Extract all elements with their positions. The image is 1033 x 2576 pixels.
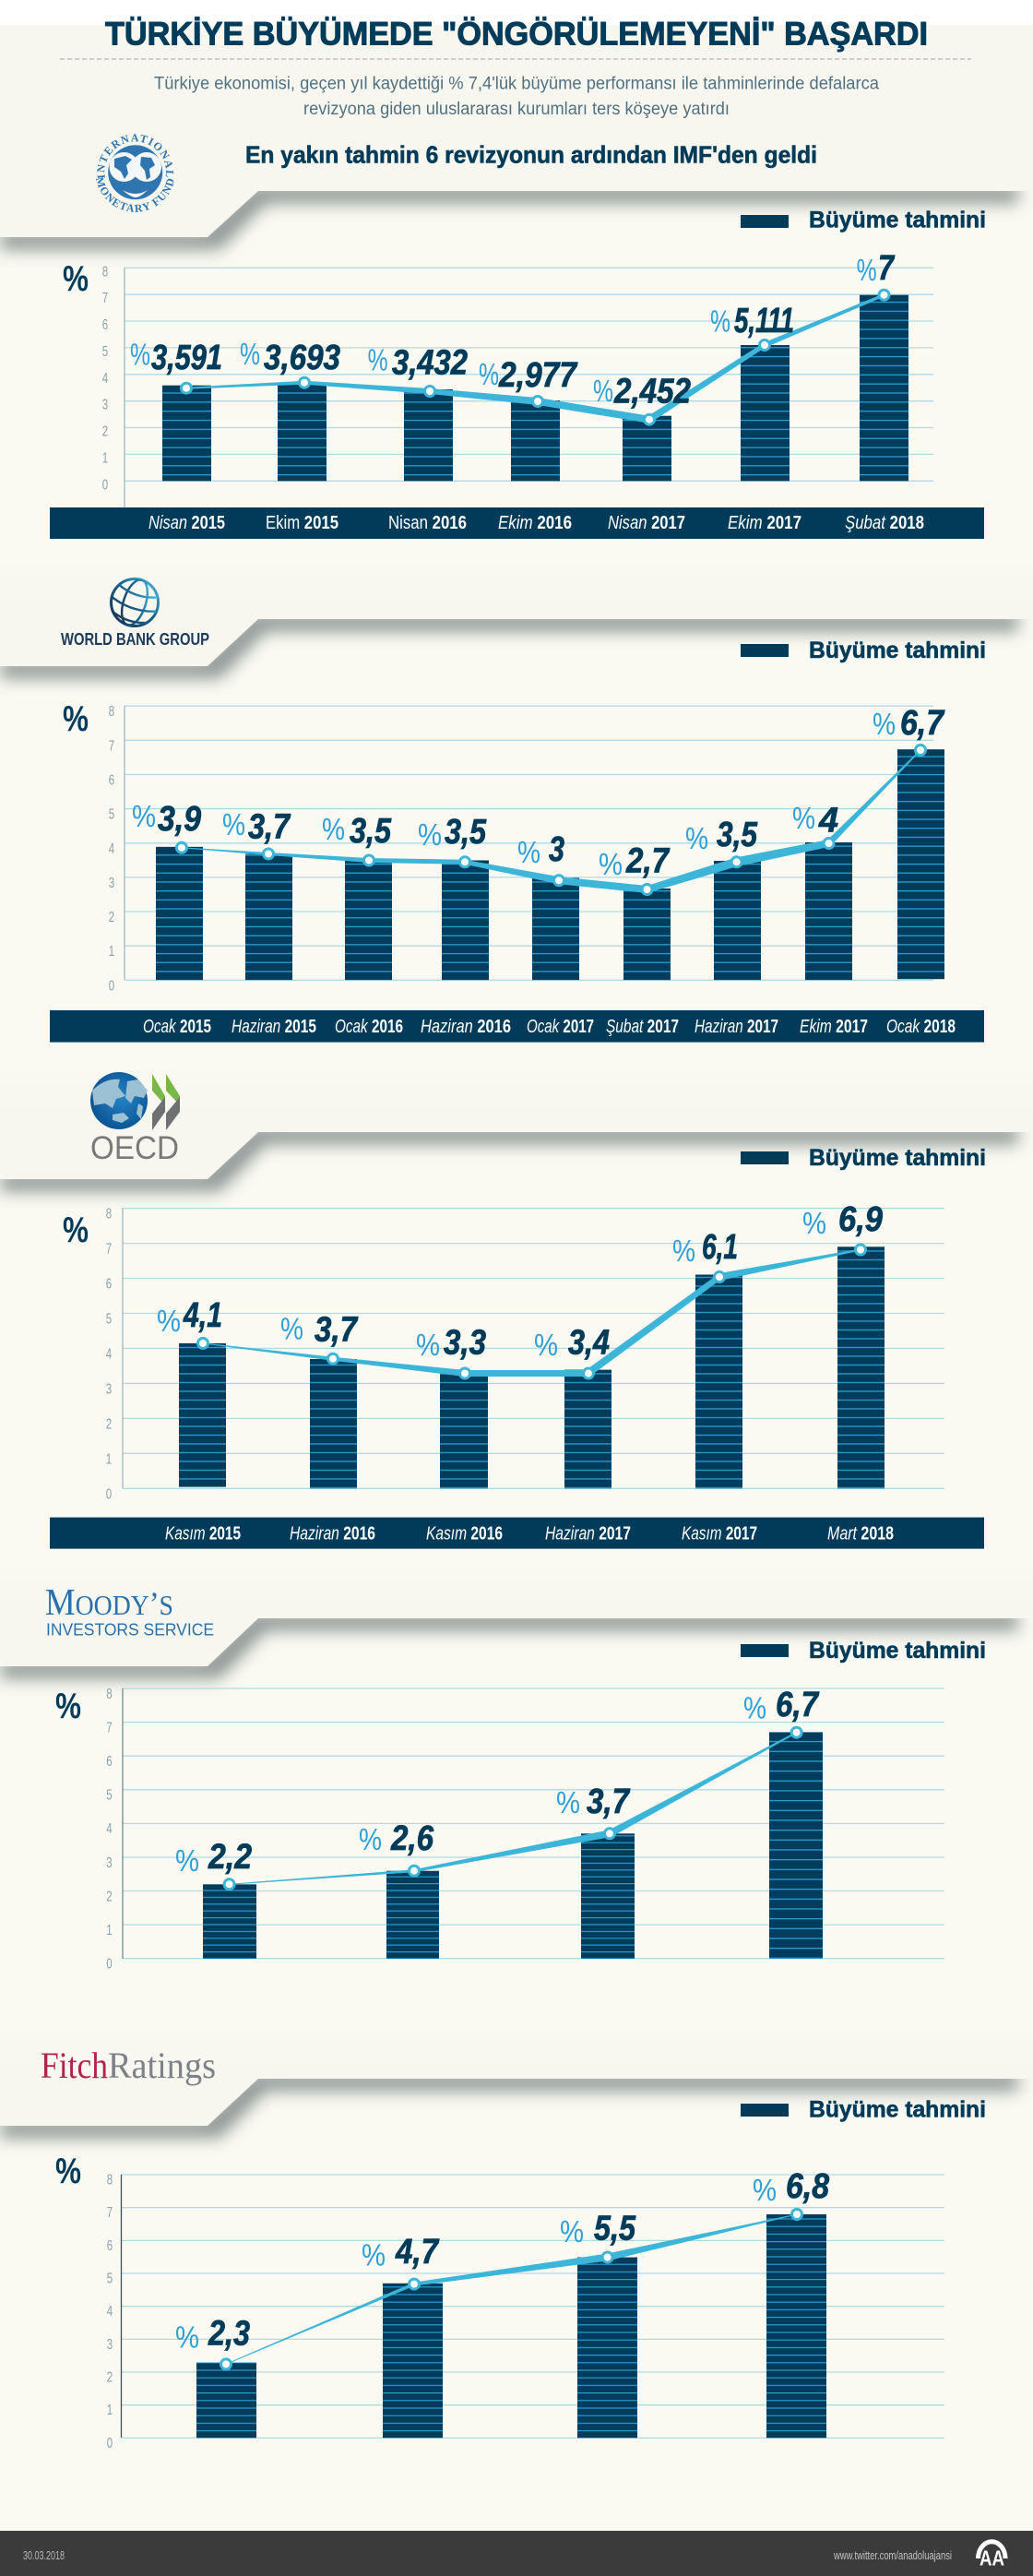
unit label: % <box>55 1687 81 1726</box>
icon: OECD globe and chevrons logo <box>90 1072 180 1130</box>
y axis ticks: 1 <box>107 2401 113 2418</box>
y axis ticks: 4 <box>107 2302 113 2320</box>
legend: Büyüme tahmini <box>809 1638 986 1664</box>
y axis ticks: 0 <box>106 1485 112 1502</box>
value labels: % <box>368 343 388 377</box>
date band: Ekim 2016 <box>498 513 572 533</box>
icon: World Bank globe logo <box>105 573 164 632</box>
World Bank wordmark: WORLD BANK GROUP <box>61 629 209 649</box>
y axis ticks: 0 <box>107 2434 113 2451</box>
date band: Ekim 2017 <box>728 513 801 533</box>
value labels: % <box>175 2320 199 2355</box>
date band: Ocak 2015 <box>143 1017 211 1037</box>
date band: Ocak 2016 <box>335 1017 403 1037</box>
date band: Ekim 2015 <box>266 513 338 533</box>
value labels: 2,2 <box>208 1838 252 1877</box>
value labels: 3,9 <box>158 800 201 839</box>
intro text: Türkiye ekonomisi, geçen yıl kaydettiği % 7,4'lük büyüme performansı ile tahminlerinde defalarca <box>154 75 879 94</box>
bar chart <box>196 2214 826 2438</box>
value labels: % <box>416 1328 440 1362</box>
value labels: 2,452 <box>613 373 691 411</box>
value labels: % <box>157 1304 181 1338</box>
y axis ticks <box>107 2171 113 2451</box>
date band: Kasım 2015 <box>165 1523 241 1544</box>
y axis ticks: 0 <box>102 475 108 493</box>
value labels: 6,1 <box>702 1228 738 1267</box>
data points <box>181 290 889 424</box>
value labels: % <box>560 2214 584 2248</box>
value labels: % <box>534 1328 558 1362</box>
y axis ticks: 3 <box>106 1854 113 1870</box>
y axis ticks: 3 <box>109 874 114 890</box>
y axis ticks: 6 <box>106 1752 113 1769</box>
value labels: % <box>873 707 896 741</box>
legend: Büyüme tahmini <box>809 638 986 663</box>
date band <box>50 1518 984 1549</box>
date band: Nisan 2017 <box>608 513 685 533</box>
value labels: % <box>175 1843 199 1878</box>
y axis ticks: 4 <box>102 369 108 386</box>
icon: Anadolu Agency logo: AA <box>980 2546 1004 2570</box>
value labels: % <box>802 1206 826 1240</box>
value labels: % <box>418 817 442 852</box>
y axis ticks: 8 <box>106 1685 113 1701</box>
y axis ticks: 7 <box>106 1240 112 1257</box>
value labels: % <box>710 304 730 338</box>
Fitch Ratings logo: Ratings <box>108 2045 216 2086</box>
value labels: % <box>743 1691 766 1725</box>
y axis ticks: 6 <box>107 2236 113 2253</box>
y axis ticks: 2 <box>102 423 108 439</box>
date band: Nisan 2015 <box>148 513 225 533</box>
y axis ticks: 0 <box>109 976 114 994</box>
footer <box>0 2531 1033 2576</box>
value labels: % <box>685 821 708 855</box>
panel: World Bank <box>0 554 1033 1043</box>
panel: IMF <box>0 134 1028 539</box>
unit label: % <box>63 699 89 739</box>
value labels: % <box>130 338 150 372</box>
trend line <box>186 293 884 423</box>
value labels: 7 <box>878 249 895 288</box>
value labels: 4,7 <box>395 2233 440 2272</box>
date band: Haziran 2015 <box>232 1017 316 1037</box>
value labels: 3,3 <box>444 1323 486 1362</box>
chart grid and axis <box>125 268 933 507</box>
value labels: % <box>672 1234 695 1268</box>
y axis ticks: 3 <box>102 396 108 412</box>
value labels: 4 <box>818 802 838 841</box>
unit label: % <box>55 2152 81 2191</box>
Fitch Ratings logo: Fitch <box>41 2045 108 2086</box>
subheading: En yakın tahmin 6 revizyonun ardından IMF'den geldi <box>245 141 817 169</box>
y axis ticks: 7 <box>106 1718 113 1735</box>
trend line <box>226 2214 797 2365</box>
date band: Haziran 2016 <box>290 1523 375 1544</box>
legend: Büyüme tahmini <box>809 208 986 233</box>
y axis ticks: 2 <box>107 2368 113 2385</box>
icon: Anadolu Agency logo <box>978 2542 1005 2570</box>
value labels: % <box>222 807 245 841</box>
y axis ticks: 6 <box>106 1275 112 1292</box>
unit label: % <box>63 259 89 299</box>
date band: Mart 2018 <box>827 1523 894 1544</box>
value labels: % <box>857 253 877 287</box>
value labels: 2,7 <box>625 841 671 880</box>
data points <box>197 1245 865 1378</box>
OECD wordmark: OECD <box>90 1130 179 1166</box>
y axis ticks <box>106 1205 112 1502</box>
OECD header band <box>0 1061 1033 1191</box>
chart grid and axis <box>123 1208 944 1488</box>
value labels: 3,5 <box>445 813 487 852</box>
y axis ticks: 4 <box>109 840 114 856</box>
trend line <box>182 749 920 893</box>
y axis ticks: 0 <box>106 1955 113 1972</box>
value labels: 3,7 <box>315 1310 359 1349</box>
y axis ticks: 2 <box>106 1887 113 1904</box>
y axis ticks: 8 <box>109 702 114 720</box>
value labels: 2,977 <box>498 356 578 395</box>
y axis ticks: 8 <box>102 263 108 280</box>
date band <box>50 1010 984 1043</box>
Moody's logo: MOODY’S <box>45 1580 173 1623</box>
title: TÜRKİYE BÜYÜMEDE "ÖNGÖRÜLEMEYENİ" BAŞARDI <box>105 15 928 52</box>
value labels <box>175 1686 820 1878</box>
value labels: % <box>280 1312 303 1346</box>
bar chart <box>203 1732 823 1959</box>
y axis ticks: 4 <box>106 1344 112 1362</box>
date band: Haziran 2017 <box>545 1523 631 1544</box>
panel: Moody's <box>0 1559 1033 1972</box>
data points <box>221 2209 802 2369</box>
value labels: 6,9 <box>838 1200 883 1239</box>
y axis ticks: 1 <box>106 1449 112 1467</box>
value labels: % <box>240 337 260 371</box>
value labels: 6,8 <box>786 2167 830 2206</box>
value labels: 3,591 <box>151 339 222 377</box>
data points <box>177 745 926 895</box>
panel: OECD <box>0 1061 1033 1549</box>
value labels <box>132 704 945 881</box>
Moody's logo <box>45 1580 214 1640</box>
value labels: 5,111 <box>734 302 794 340</box>
value labels: 6,7 <box>900 704 945 743</box>
value labels: 4,1 <box>183 1296 222 1335</box>
y axis ticks: 3 <box>106 1379 112 1397</box>
y axis ticks: 8 <box>107 2171 113 2188</box>
date band: Nisan 2016 <box>388 513 467 533</box>
value labels: % <box>517 835 540 869</box>
value labels: % <box>359 1822 382 1856</box>
value labels: 6,7 <box>776 1686 820 1724</box>
value labels: % <box>593 374 613 408</box>
y axis ticks: 5 <box>102 342 108 359</box>
y axis ticks: 7 <box>109 736 114 754</box>
value labels: 3,5 <box>717 816 758 854</box>
date band: Haziran 2017 <box>695 1017 778 1037</box>
bar chart <box>179 1246 885 1488</box>
value labels: 2,6 <box>390 1819 434 1858</box>
chart grid and axis <box>123 1688 944 1959</box>
y axis ticks: 7 <box>107 2203 113 2221</box>
y axis ticks: 5 <box>109 805 114 822</box>
value labels: 5,5 <box>594 2210 636 2248</box>
unit label: % <box>63 1210 89 1250</box>
IMF header band <box>0 127 1033 249</box>
bar chart <box>156 749 944 980</box>
value labels: % <box>362 2238 386 2272</box>
y axis ticks: 8 <box>106 1205 112 1222</box>
chart grid and axis <box>122 2175 944 2438</box>
date band: Şubat 2017 <box>606 1017 679 1037</box>
y axis ticks: 4 <box>106 1819 113 1837</box>
footer date: 30.03.2018 <box>23 2548 65 2562</box>
y axis ticks: 1 <box>106 1921 113 1938</box>
y axis ticks <box>109 702 114 994</box>
icon: IMF seal logo: INTERNATIONAL <box>97 134 173 179</box>
value labels <box>157 1200 883 1362</box>
date band: Ocak 2017 <box>527 1017 594 1037</box>
value labels: % <box>132 799 156 833</box>
date band: Kasım 2017 <box>682 1523 757 1544</box>
value labels: % <box>599 847 623 881</box>
y axis ticks <box>106 1685 113 1972</box>
value labels <box>175 2167 830 2355</box>
y axis ticks: 2 <box>106 1414 112 1432</box>
legend: Büyüme tahmini <box>809 1145 986 1171</box>
value labels: % <box>556 1785 580 1819</box>
icon: IMF seal logo: MONETARY FUND <box>96 177 173 212</box>
Fitch header band <box>0 2021 1033 2138</box>
chart grid and axis <box>125 706 933 980</box>
value labels: 3,7 <box>248 808 291 847</box>
icon: IMF seal logo <box>96 134 173 212</box>
value labels: % <box>792 801 815 835</box>
date band: Şubat 2018 <box>845 513 924 533</box>
bar chart <box>162 295 908 481</box>
value labels: 3,4 <box>568 1323 610 1362</box>
panel: Fitch <box>0 2021 1033 2451</box>
value labels: % <box>322 812 345 846</box>
World Bank header band <box>0 554 1033 678</box>
y axis ticks: 5 <box>107 2270 113 2286</box>
intro text <box>154 75 879 119</box>
value labels: 3 <box>549 830 564 869</box>
value labels: % <box>753 2173 777 2207</box>
value labels: 3,693 <box>264 339 340 377</box>
y axis ticks <box>102 263 108 493</box>
data points <box>224 1727 801 1890</box>
value labels: 3,5 <box>350 812 392 851</box>
Moody's header band <box>0 1559 1033 1678</box>
date band: Haziran 2016 <box>421 1017 511 1037</box>
footer link: www.twitter.com/anadoluajansi <box>833 2548 952 2562</box>
trend line <box>203 1249 861 1377</box>
y axis ticks: 5 <box>106 1310 112 1327</box>
value labels <box>130 249 895 411</box>
y axis ticks: 7 <box>102 289 108 306</box>
value labels: % <box>479 357 499 391</box>
value labels: 2,3 <box>208 2315 250 2354</box>
legend: Büyüme tahmini <box>809 2096 986 2122</box>
Fitch Ratings logo <box>41 2045 216 2086</box>
y axis ticks: 2 <box>109 908 114 924</box>
date band: Ocak 2018 <box>886 1017 956 1037</box>
trend line <box>230 1732 797 1885</box>
value labels: 3,432 <box>392 344 468 383</box>
y axis ticks: 6 <box>109 771 114 788</box>
date band <box>50 507 984 539</box>
value labels: 3,7 <box>587 1783 631 1821</box>
date band: Kasım 2016 <box>426 1523 503 1544</box>
y axis ticks: 3 <box>107 2335 113 2352</box>
intro text: revizyona giden uluslararası kurumları ters köşeye yatırdı <box>303 100 730 119</box>
Moody's logo: INVESTORS SERVICE <box>46 1621 214 1640</box>
y axis ticks: 5 <box>106 1786 113 1803</box>
y axis ticks: 1 <box>102 448 108 466</box>
date band: Ekim 2017 <box>800 1017 868 1037</box>
y axis ticks: 6 <box>102 316 108 332</box>
y axis ticks: 1 <box>109 942 114 960</box>
